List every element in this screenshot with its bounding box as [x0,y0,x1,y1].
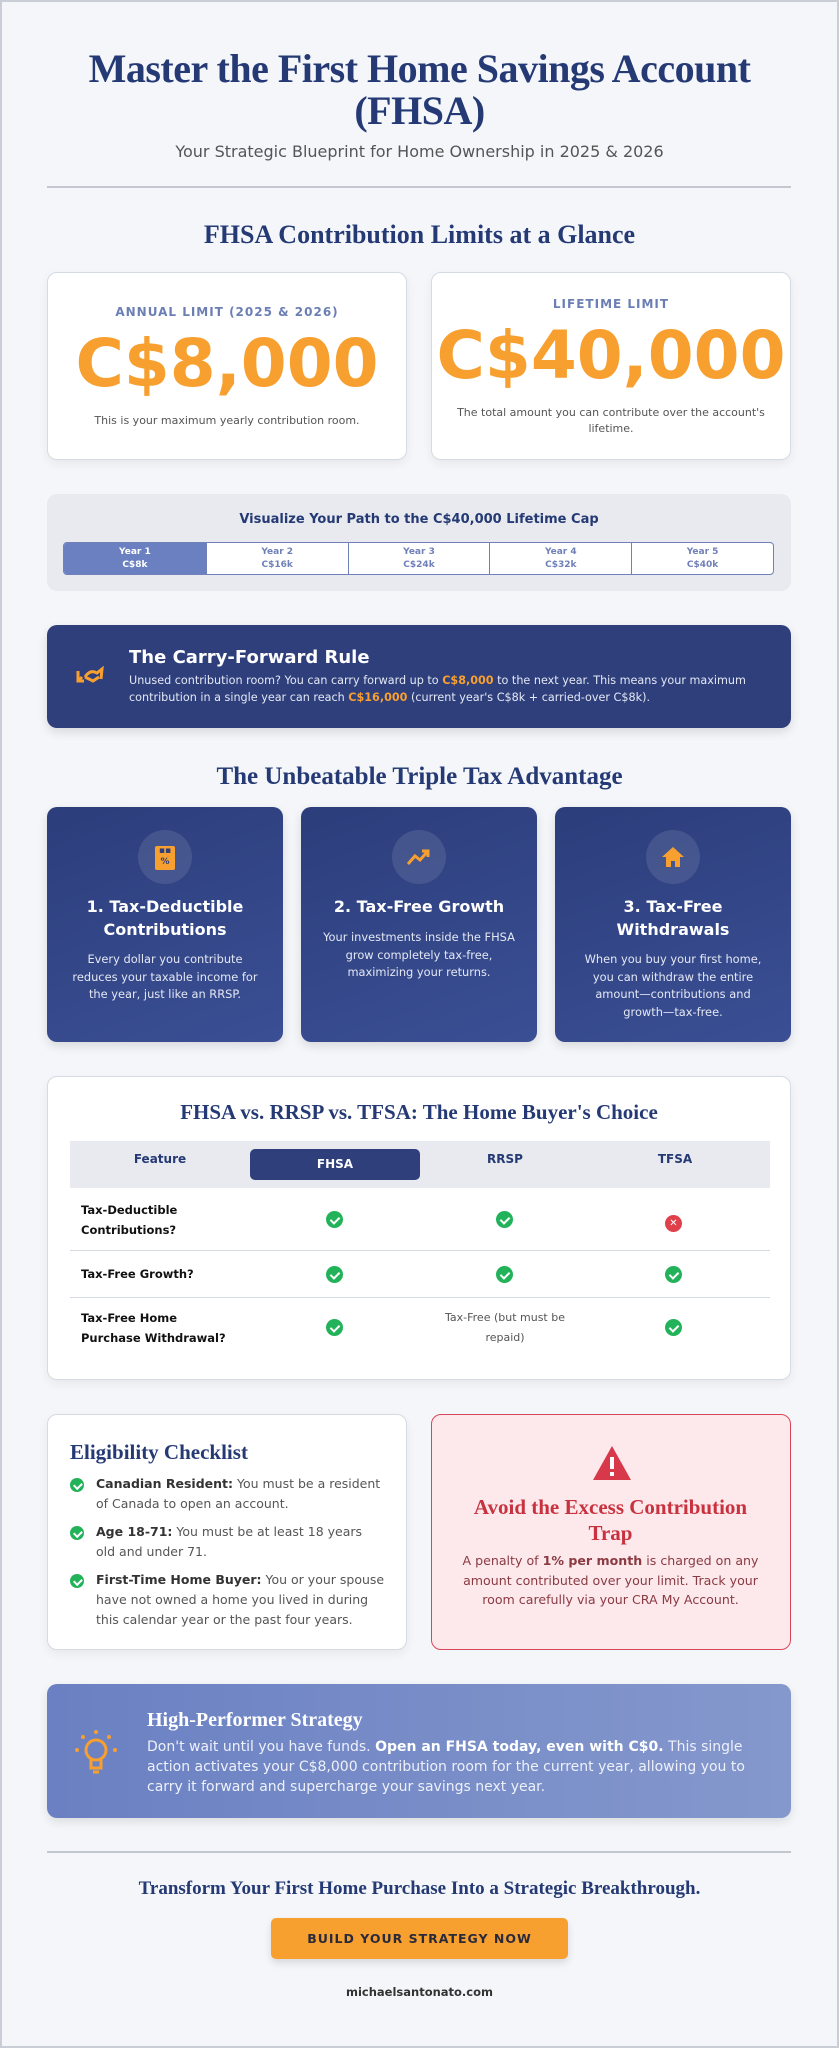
progress bar: Year 3 [403,547,435,557]
text: reduces your taxable income for [72,970,258,984]
table title: FHSA vs. RRSP vs. TFSA: The Home Buyer's Choice [180,1100,658,1124]
icon: lightbulb [75,1730,117,1774]
item 3: this calendar year or the past four years. [96,1612,353,1627]
row 1: ✕ [669,1218,678,1229]
text: Your investments inside the FHSA [323,930,515,944]
row 3: Tax-Free Home [81,1311,177,1325]
CTA button: BUILD YOUR STRATEGY NOW [307,1931,532,1946]
progress bar: C$32k [545,560,576,570]
text [585,952,761,1018]
title: 3. Tax-Free [624,897,722,916]
progress bar: Year 2 [261,547,293,557]
title: 1. Tax-Deductible [87,897,243,916]
progress bar: Year 4 [545,547,577,557]
panel: carry-forward rule [47,625,791,728]
title: Contributions [103,920,227,939]
progress bar [63,542,774,575]
desc [457,406,765,435]
heading: triple tax: The Unbeatable Triple Tax Advantage [216,763,623,790]
progress bar: Year 1 [119,547,151,557]
title: 2. Tax-Free Growth [334,897,504,916]
progress bar: C$40k [687,560,718,570]
path title: Visualize Your Path to the C$40,000 Lifetime Cap [239,512,599,527]
panel: tax-free withdrawals [555,807,791,1042]
strategy text: Don't wait until you have funds. Open an FHSA today, even with C$0. This single [147,1739,743,1755]
heading: contribution limits: FHSA Contribution Limits at a Glance [204,220,635,249]
row 1: Contributions? [81,1223,176,1237]
item 3 [70,1572,384,1627]
icon: carry arrows [76,666,104,683]
icon: calculator: % [160,857,170,867]
title [617,897,729,939]
item 1: Canadian Resident: You must be a resident [96,1476,380,1491]
strategy text [147,1739,745,1795]
icon: house [646,830,700,884]
panel: lifetime limit [431,272,791,460]
item 2: Age 18-71: You must be at least 18 years [96,1524,362,1539]
CTA heading: Transform Your First Home Purchase Into a Strategic Breakthrough. [139,1878,700,1899]
progress bar: C$16k [262,560,293,570]
text: maximizing your returns. [347,965,491,979]
number: 40000: C$40,000 [436,317,786,394]
panel: high-performer strategy [47,1684,791,1818]
item 1 [70,1476,380,1511]
header row: Feature [134,1152,186,1166]
warning text: A penalty of 1% per month is charged on any [462,1553,758,1568]
panel: tax-deductible [47,807,283,1042]
text [323,930,515,979]
title [87,897,243,939]
text: growth—tax-free. [623,1004,723,1018]
warning text: room carefully via your CRA My Account. [482,1592,739,1607]
number: 8000: C$8,000 [75,325,379,402]
progress bar: Year 5 [687,547,718,557]
CTA button [271,1918,568,1959]
carry text: Unused contribution room? You can carry forward up to C$8,000 to the next year. This means your maximum [129,674,746,687]
progress bar: C$24k [403,560,435,570]
text: grow completely tax-free, [346,948,492,962]
row 3: repaid) [485,1331,525,1344]
strategy title: High-Performer Strategy [147,1709,363,1731]
title [89,46,751,133]
item 1: of Canada to open an account. [96,1496,289,1511]
row 3 [81,1311,682,1345]
warning title: Trap [589,1521,632,1545]
desc: This is your maximum yearly contribution room. [94,414,360,427]
FHSA pill: FHSA [317,1157,353,1171]
strategy text: carry it forward and supercharge your savings next year. [147,1779,545,1795]
desc: lifetime. [588,422,634,435]
panel: tax-free growth [301,807,537,1042]
icon: warning triangle [593,1446,631,1480]
row 3: Tax-Free (but must be [445,1311,565,1324]
subtitle: Your Strategic Blueprint for Home Ownership in 2025 & 2026 [175,142,664,161]
strategy text: action activates your C$8,000 contribution room for the current year, allowing you to [147,1759,745,1775]
text [72,952,258,1001]
panel: comparison table [47,1076,791,1380]
panel: path visual [47,494,791,591]
carry title: The Carry-Forward Rule [129,647,370,668]
title: Master the First Home Savings Account [89,46,750,91]
panel: annual limit [47,272,407,460]
icon: chart up [392,830,446,884]
warning text: amount contributed over your limit. Track your [463,1572,758,1588]
icon: calculator [138,830,192,884]
row 2: Tax-Free Growth? [81,1267,194,1281]
icon: calculator: ▪▪ [159,846,171,856]
text: the year, just like an RRSP. [89,987,241,1001]
label: annual: ANNUAL LIMIT (2025 & 2026) [115,305,339,319]
row 1 [70,1189,770,1251]
panel: excess contribution warning [431,1414,791,1650]
row 3: Purchase Withdrawal? [81,1331,226,1345]
carry text: contribution in a single year can reach C$16,000 (current year's C$8k + carried-over C$8k). [129,691,650,704]
item 3: First-Time Home Buyer: You or your spouse [96,1572,384,1587]
progress bar: C$8k [122,560,147,570]
eligibility title: Eligibility Checklist [70,1440,248,1464]
title: Withdrawals [617,920,729,939]
desc: The total amount you can contribute over the account's [457,406,765,419]
text: When you buy your first home, [585,952,761,966]
title: (FHSA) [354,88,485,133]
text: Every dollar you contribute [87,952,243,966]
header row [70,1141,770,1188]
item 3: have not owned a home you lived in during [96,1592,368,1607]
carry text [129,674,746,704]
panel: eligibility checklist [47,1414,407,1650]
warning title: Avoid the Excess Contribution [474,1495,747,1519]
item 2: old and under 71. [96,1544,207,1559]
row 2 [70,1252,770,1298]
website: michaelsantonato.com [346,1985,493,1999]
header row: RRSP [487,1152,523,1166]
header row: TFSA [658,1152,692,1166]
text: you can withdraw the entire [593,970,753,984]
label: lifetime: LIFETIME LIMIT [553,297,669,311]
row 1: Tax-Deductible [81,1203,177,1217]
item 2 [70,1524,362,1559]
FHSA pill [250,1149,420,1180]
text: amount—contributions and [595,987,751,1001]
warning title [474,1495,747,1545]
warning text [462,1553,758,1607]
